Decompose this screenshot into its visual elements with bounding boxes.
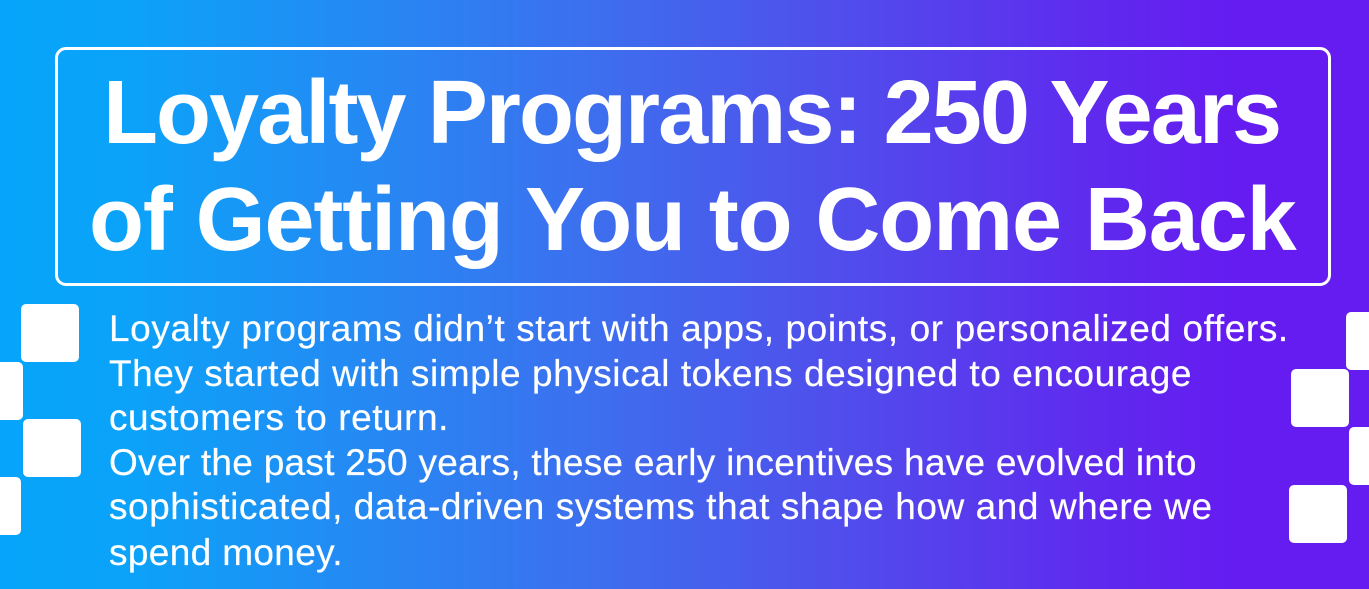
- intro text: sophisticated, data-driven systems that shape how and where we: [109, 486, 1213, 527]
- decorative squares right: [1289, 312, 1369, 543]
- title: [89, 63, 1297, 270]
- title: Loyalty Programs: 250 Years: [103, 63, 1280, 163]
- intro text: Loyalty programs didn’t start with apps, points, or personalized offers.: [109, 308, 1289, 349]
- title: of Getting You to Come Back: [89, 170, 1296, 270]
- intro text: They started with simple physical tokens designed to encourage: [109, 352, 1192, 394]
- title box: [55, 47, 1331, 286]
- intro text: Over the past 250 years, these early incentives have evolved into: [109, 442, 1197, 482]
- decorative squares left: [0, 304, 81, 535]
- intro text: customers to return.: [109, 397, 449, 438]
- intro text: [109, 308, 1289, 573]
- intro text: spend money.: [109, 532, 343, 572]
